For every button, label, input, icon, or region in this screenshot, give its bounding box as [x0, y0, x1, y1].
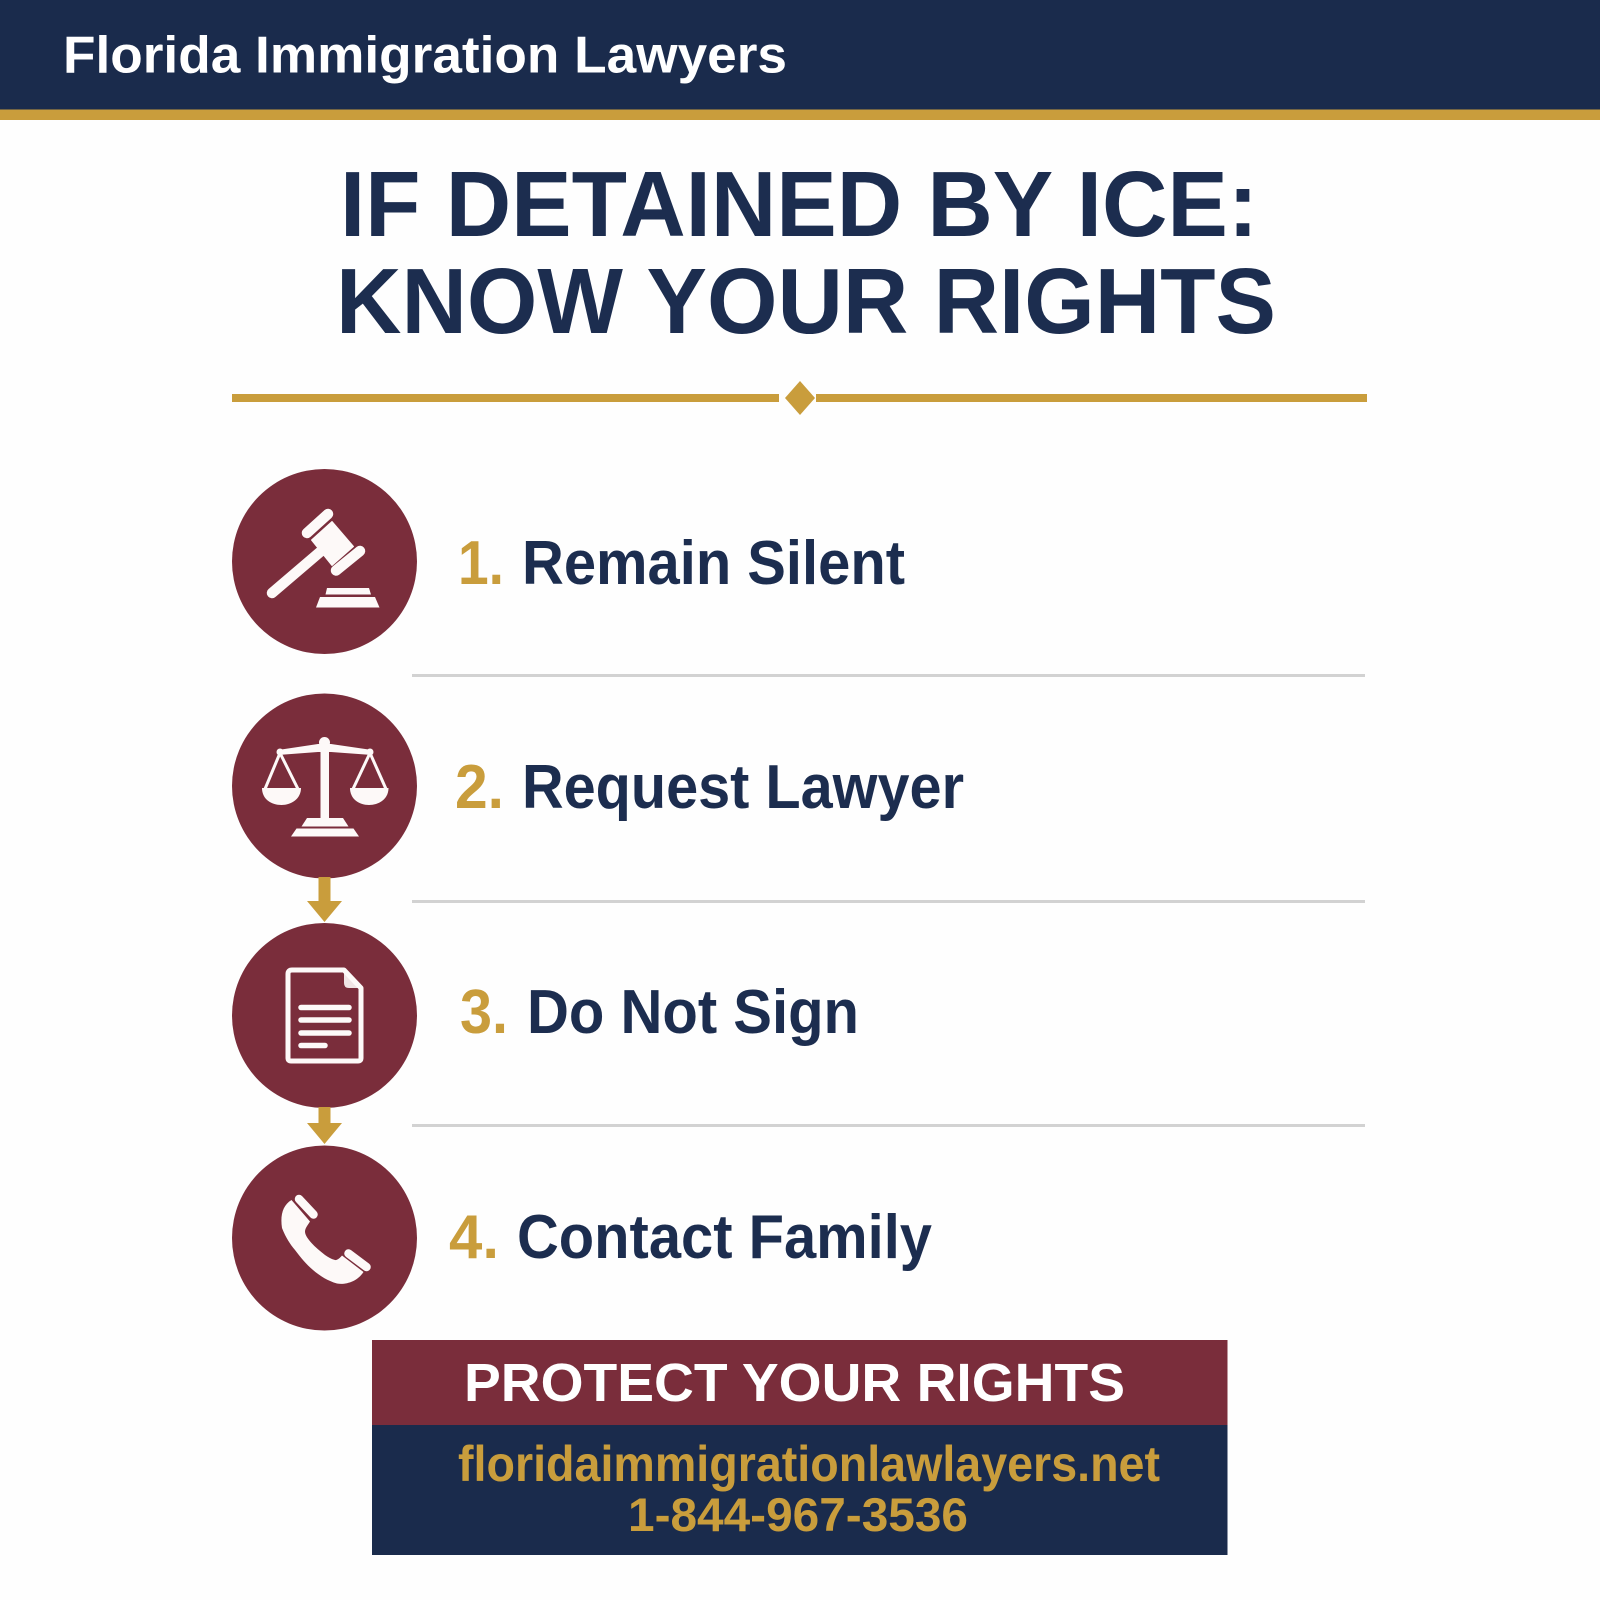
icon: document	[232, 923, 417, 1108]
arrow: step 2 to 3	[307, 877, 342, 922]
title: IF DETAINED BY ICE:	[340, 152, 1258, 256]
banner heading	[372, 1340, 1228, 1425]
step 4: contact family	[232, 1146, 932, 1330]
title: KNOW YOUR RIGHTS	[336, 249, 1276, 353]
step 4 label: 4.	[449, 1203, 499, 1272]
title divider with diamond	[232, 381, 1367, 415]
banner contact details: 1-844-967-3536	[628, 1488, 968, 1541]
banner contact details	[372, 1425, 1228, 1555]
banner heading: PROTECT YOUR RIGHTS	[464, 1353, 1125, 1413]
arrow: step 3 to 4	[307, 1107, 342, 1144]
step 2: request lawyer	[232, 694, 964, 878]
icon: gavel	[232, 469, 417, 654]
icon: telephone handset	[232, 1146, 417, 1330]
header brand name: Florida Immigration Lawyers	[63, 26, 787, 84]
step 3: do not sign	[232, 923, 859, 1108]
step 4 label: Contact Family	[517, 1203, 932, 1272]
step 1: remain silent	[232, 469, 905, 654]
step 1 label: 1.	[458, 529, 504, 598]
step 3 label: 3.	[460, 978, 508, 1047]
banner contact details: floridaimmigrationlawlayers.net	[458, 1436, 1160, 1492]
step 2 label: 2.	[455, 753, 504, 822]
step 2 label: Request Lawyer	[522, 753, 964, 822]
title	[336, 152, 1276, 353]
call-to-action banner	[372, 1340, 1228, 1555]
header bar	[0, 0, 1600, 120]
step 1 label: Remain Silent	[522, 529, 905, 598]
icon: scales of justice	[232, 694, 417, 878]
step 3 label: Do Not Sign	[527, 978, 859, 1047]
